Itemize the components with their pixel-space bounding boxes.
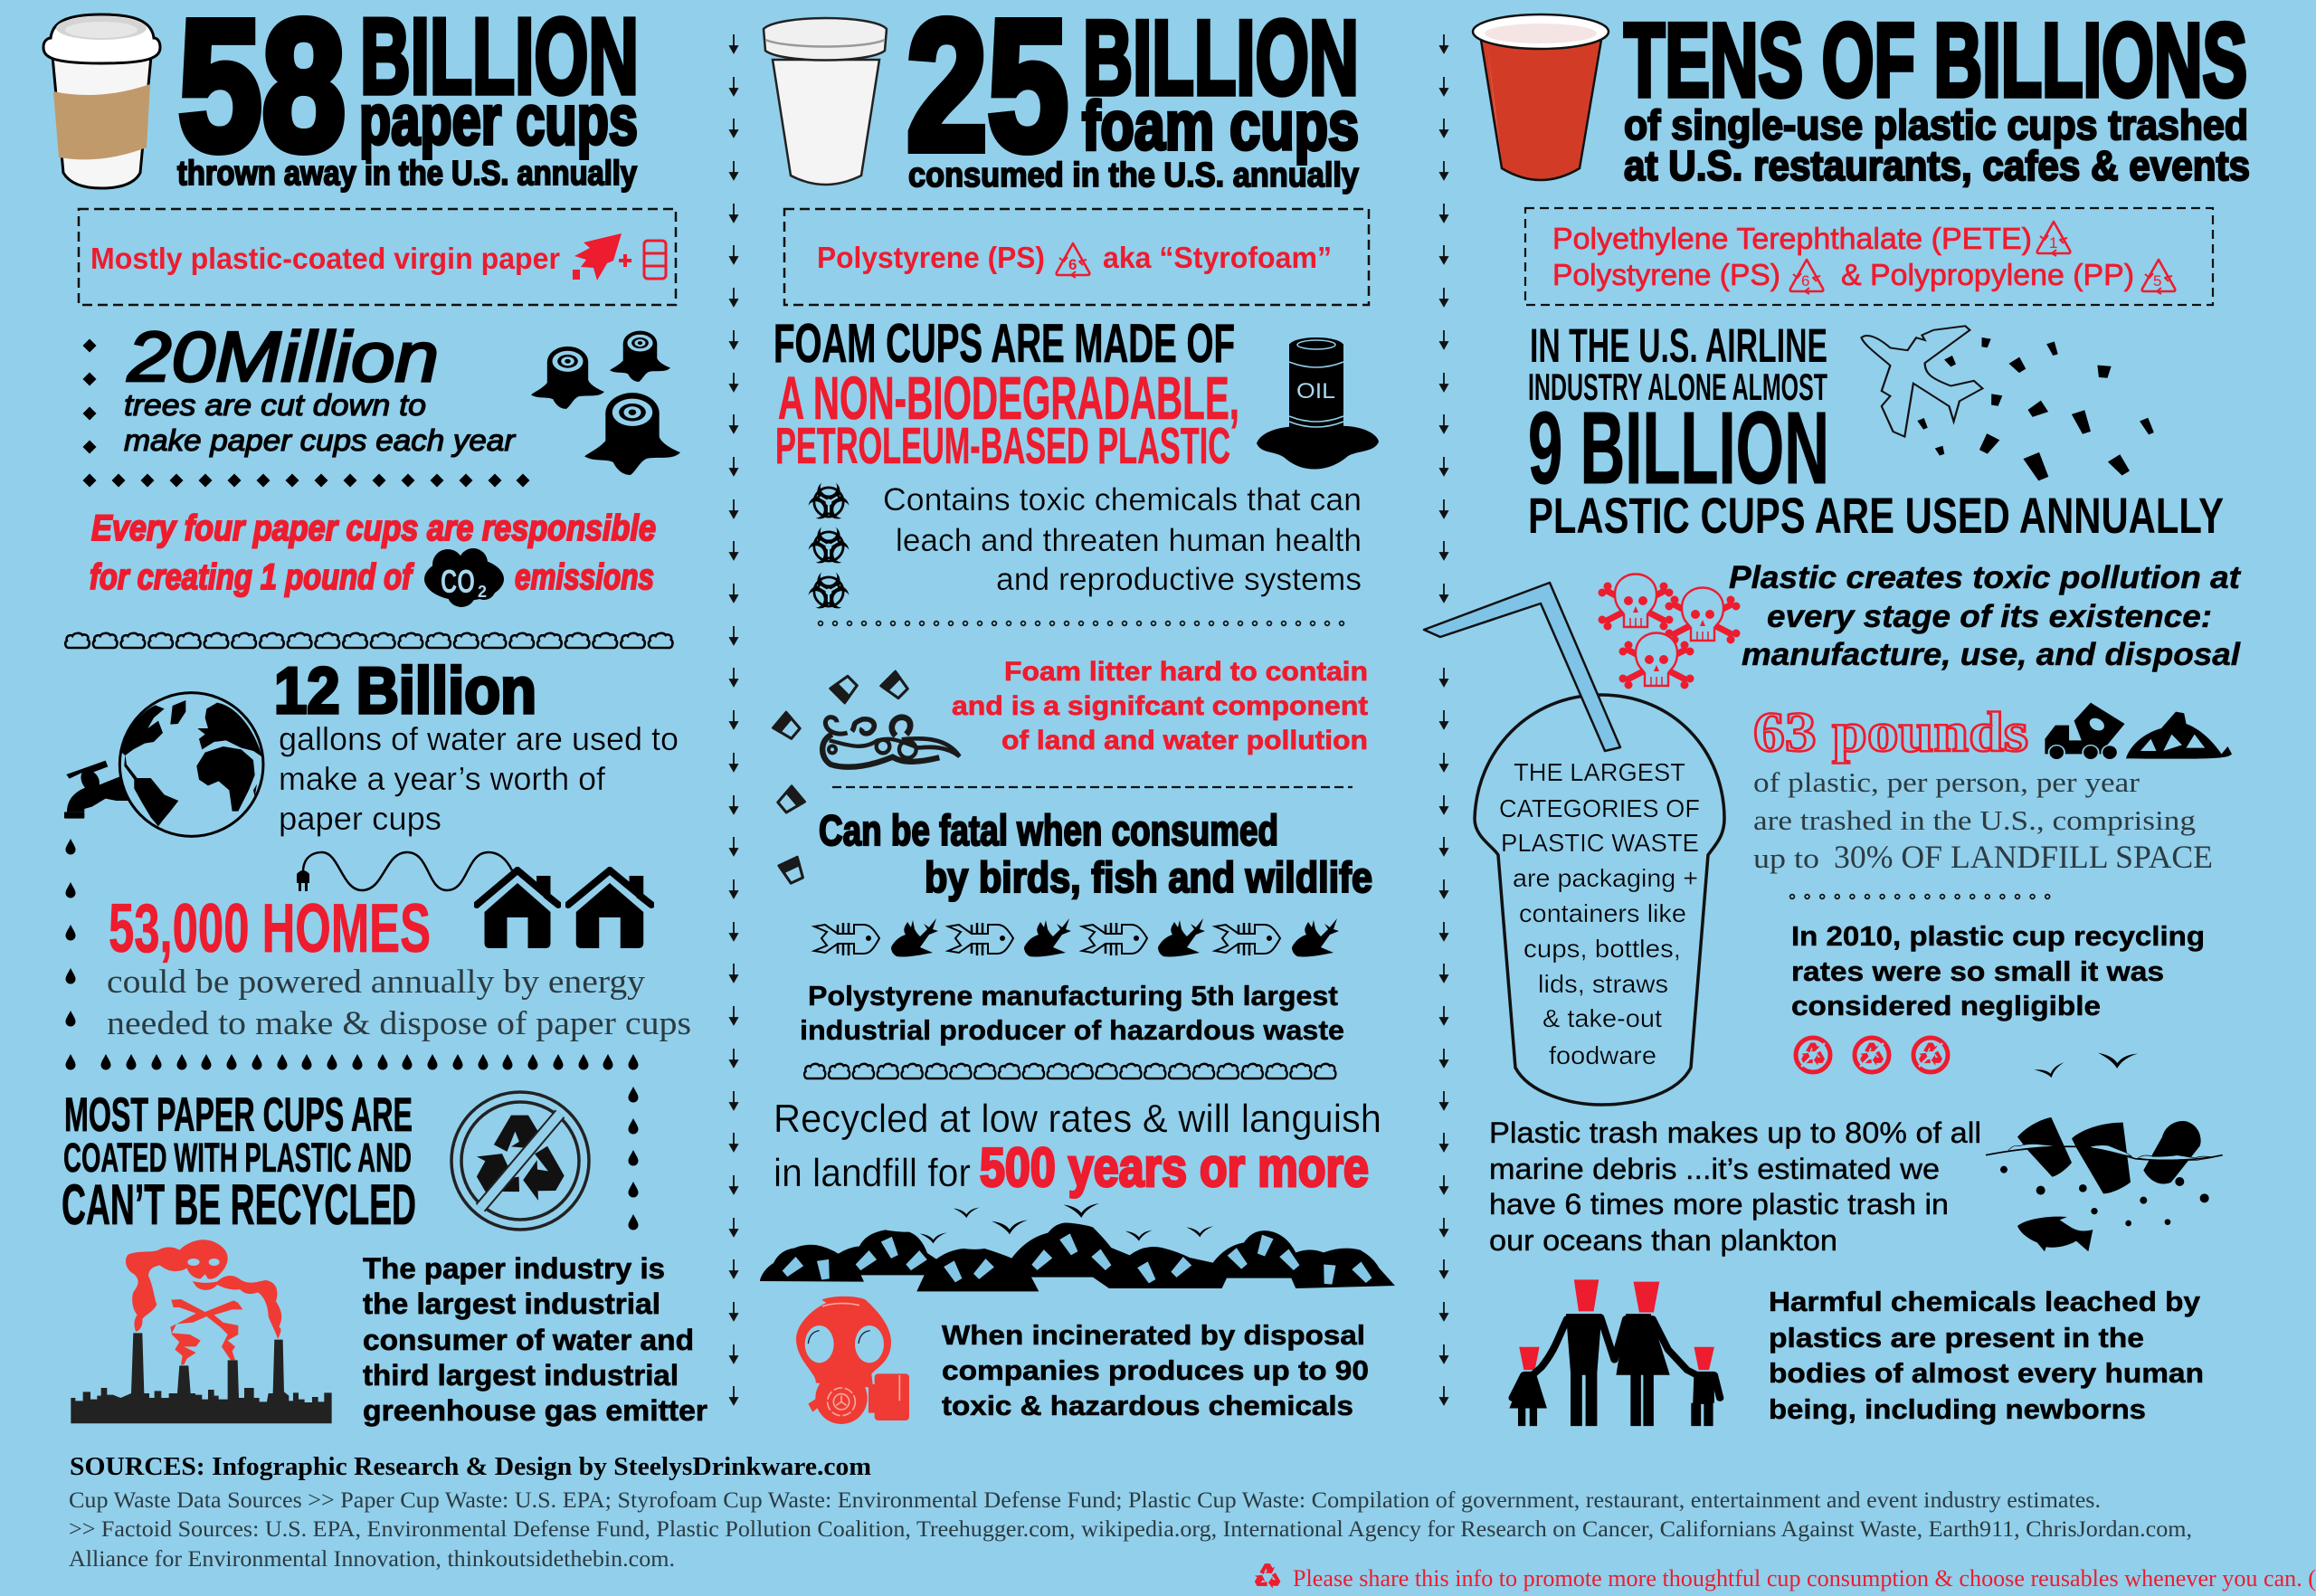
material box: Polystyrene (PS)	[817, 241, 1045, 274]
icon: biohazard symbols	[802, 479, 855, 613]
material box	[79, 209, 676, 305]
water drop border	[65, 839, 639, 1230]
title: tens of billions: of single-use plastic cups trashed	[1624, 101, 2248, 148]
text: inside cup	[1499, 758, 1700, 1069]
sources footer: SOURCES: Infographic Research & Design by SteelysDrinkware.com	[70, 1452, 871, 1481]
icon: CO2 cloud	[424, 548, 504, 607]
stat: 12 billion gallons: gallons of water are used to	[279, 720, 679, 757]
heading: airline industry	[1528, 319, 2224, 544]
title: 58 billion paper cups: thrown away in the U.S. annually	[177, 155, 637, 193]
stat: 63 pounds: up to	[1753, 842, 1819, 874]
sources footer: Alliance for Environmental Innovation, thinkoutsidethebin.com.	[69, 1547, 675, 1572]
icon: CO2 cloud: CO	[441, 563, 475, 600]
stat: 63 pounds	[1753, 702, 2213, 875]
material box	[784, 209, 1369, 305]
material box: 6	[1068, 256, 1077, 273]
heading: cannot be recycled	[62, 1088, 416, 1237]
text: toxic pollution: Plastic creates toxic pollution at	[1729, 560, 2241, 595]
dotted divider	[1792, 894, 2055, 899]
text: inside cup: CATEGORIES OF	[1499, 794, 1700, 822]
heading: foam cups are made of: PETROLEUM-BASED PLASTIC	[775, 417, 1230, 475]
text: 500 years: Recycled at low rates & will languish	[774, 1097, 1381, 1141]
text: foam litter: and is a signifcant component	[952, 691, 1368, 721]
text: inside cup: THE LARGEST	[1514, 758, 1685, 786]
icon: landfill with birds	[760, 1203, 1395, 1291]
callout: CO2 emissions: for creating 1 pound of	[90, 557, 414, 597]
dashed divider	[832, 786, 1353, 788]
heading: airline industry: IN THE U.S. AIRLINE	[1530, 319, 1827, 373]
icon: gas mask	[796, 1297, 909, 1424]
text: harmful chemicals: plastics are present in the	[1769, 1322, 2144, 1354]
title: 58 billion paper cups: paper cups	[359, 80, 638, 159]
icon: red barrel	[644, 241, 666, 279]
text: marine debris: Plastic trash makes up to 80% of all	[1489, 1116, 1981, 1149]
stat: 20 million trees: make paper cups each year	[124, 423, 517, 457]
text: foam litter: of land and water pollution	[1001, 726, 1368, 755]
text: incineration: toxic & hazardous chemicals	[942, 1390, 1353, 1421]
stat: 63 pounds: 30% OF LANDFILL SPACE	[1834, 839, 2213, 875]
stat: 12 billion gallons: paper cups	[279, 800, 441, 837]
text: inside cup: cups, bottles,	[1523, 935, 1681, 963]
icon: globe with faucet	[64, 693, 263, 836]
heading: foam cups are made of: FOAM CUPS ARE MADE OF	[774, 313, 1235, 374]
stat: 20 million trees: 20Million	[127, 317, 439, 396]
text: marine debris: marine debris ...it’s estimated we	[1489, 1153, 1940, 1185]
text: hazardous waste: industrial producer of hazardous waste	[800, 1014, 1344, 1046]
icon: oil barrel	[1257, 337, 1379, 470]
stat: 53,000 homes: needed to make & dispose of paper cups	[107, 1005, 691, 1042]
text: harmful chemicals	[1769, 1286, 2204, 1425]
icon: no recycling	[451, 1092, 589, 1230]
text: inside cup: PLASTIC WASTE	[1501, 829, 1699, 857]
stat: 63 pounds: 63 pounds	[1753, 702, 2028, 764]
heading: foam cups are made of: A NON-BIODEGRADABLE,	[778, 365, 1239, 432]
column divider arrows: right	[1440, 34, 1448, 1404]
text: paper industry: the largest industrial	[363, 1287, 660, 1320]
text: paper industry: The paper industry is	[363, 1252, 665, 1285]
title: 25 billion foam cups	[906, 0, 1359, 195]
text: toxic chemicals: and reproductive systems	[996, 562, 1362, 597]
heading: cannot be recycled: MOST PAPER CUPS ARE	[64, 1088, 413, 1142]
heading: cannot be recycled: CAN’T BE RECYCLED	[62, 1173, 416, 1237]
material box: Mostly plastic-coated virgin paper	[90, 242, 560, 275]
icon: garbage truck and heap	[2045, 703, 2232, 760]
stat: 53,000 homes: could be powered annually by energy	[107, 964, 646, 1001]
sources footer	[69, 1452, 2192, 1572]
material box: 6	[1801, 272, 1809, 290]
material box: Polystyrene (PS)	[1552, 258, 1780, 291]
icon: family with cup heads	[1509, 1279, 1720, 1426]
title: tens of billions	[1624, 3, 2250, 189]
text: inside cup: are packaging +	[1513, 864, 1698, 892]
text: fatal to wildlife: Can be fatal when consumed	[819, 806, 1278, 854]
text: toxic chemicals: leach and threaten human health	[896, 523, 1362, 558]
text: marine debris	[1489, 1116, 1981, 1257]
text: inside cup: containers like	[1519, 899, 1686, 927]
stat: 53,000 homes	[107, 890, 691, 1042]
material box: 5	[2153, 272, 2161, 290]
icon: factory with toxic smoke	[71, 1240, 332, 1423]
text: incineration: When incinerated by disposal	[942, 1319, 1365, 1351]
text: 500 years: 500 years or more	[980, 1137, 1369, 1198]
text: incineration: companies produces up to 90	[942, 1354, 1369, 1386]
title: 25 billion foam cups: consumed in the U.S. annually	[908, 157, 1359, 195]
stat: 12 billion gallons: make a year’s worth of	[279, 760, 606, 797]
text: marine debris: have 6 times more plastic trash in	[1489, 1188, 1949, 1221]
heading: airline industry: INDUSTRY ALONE ALMOST	[1528, 366, 1827, 408]
callout: CO2 emissions	[90, 508, 656, 607]
panel: plastic cups	[1424, 3, 2250, 1426]
icon: plug and wire	[297, 852, 512, 891]
text: harmful chemicals: bodies of almost every human	[1769, 1357, 2204, 1389]
heading: cannot be recycled: COATED WITH PLASTIC AND	[63, 1135, 412, 1181]
text: toxic pollution: every stage of its existence:	[1767, 599, 2212, 634]
callout: CO2 emissions: emissions	[515, 557, 654, 597]
text: fatal to wildlife	[819, 806, 1372, 901]
text: harmful chemicals: being, including newborns	[1769, 1393, 2146, 1425]
material box: aka “Styrofoam”	[1103, 241, 1332, 274]
icon: foam litter with wave	[773, 670, 960, 885]
material box: Polyethylene Terephthalate (PETE)	[1552, 222, 2032, 255]
stat: 63 pounds: of plastic, per person, per year	[1753, 766, 2140, 798]
stat: 20 million trees: trees are cut down to	[124, 388, 426, 422]
text: 2010 recycling: In 2010, plastic cup recycling	[1791, 920, 2205, 952]
icons: fish skeletons and dead birds	[814, 918, 1339, 957]
title: 58 billion paper cups	[177, 0, 639, 193]
material box	[1525, 208, 2213, 305]
icon: cup with straw	[1424, 583, 1724, 1105]
icon: oil barrel: OIL	[1296, 379, 1335, 404]
text: toxic pollution: manufacture, use, and disposal	[1742, 637, 2241, 672]
panel: paper cups	[43, 0, 707, 1427]
stat: 20 million trees	[124, 317, 517, 457]
heading: foam cups are made of	[774, 313, 1239, 475]
cloud divider	[65, 633, 672, 648]
stat: 12 billion gallons	[274, 655, 679, 837]
text: paper industry: greenhouse gas emitter	[363, 1394, 707, 1427]
icon: CO2 cloud: 2	[478, 583, 487, 601]
text: fatal to wildlife: by birds, fish and wildlife	[925, 853, 1372, 901]
text: hazardous waste: Polystyrene manufacturing 5th largest	[808, 980, 1338, 1012]
text: 500 years: in landfill for	[774, 1151, 971, 1195]
icon: houses	[477, 870, 651, 948]
title: 25 billion foam cups: foam cups	[1082, 88, 1359, 165]
dotted divider	[821, 621, 1356, 626]
title: tens of billions: at U.S. restaurants, cafes & events	[1624, 142, 2250, 189]
text: marine debris: our oceans than plankton	[1489, 1224, 1837, 1257]
text: paper industry	[363, 1252, 707, 1427]
icon: skulls	[1598, 574, 1741, 689]
text: toxic chemicals: Contains toxic chemicals that can	[883, 482, 1362, 518]
icon: tree stumps	[531, 331, 680, 475]
text: hazardous waste	[800, 980, 1344, 1046]
text: foam litter: Foam litter hard to contain	[1004, 657, 1368, 687]
icon: cups in ocean with birds and fish	[1986, 1051, 2223, 1251]
icon: foam cup	[764, 18, 887, 185]
text: toxic chemicals	[883, 482, 1362, 597]
stat: 12 billion gallons: 12 Billion	[274, 655, 536, 727]
callout: CO2 emissions: Every four paper cups are responsible	[91, 508, 656, 548]
text: inside cup: foodware	[1549, 1041, 1656, 1069]
stat: 53,000 homes: 53,000 HOMES	[109, 890, 431, 967]
cloud divider	[804, 1064, 1335, 1078]
text: inside cup: lids, straws	[1538, 970, 1668, 998]
text: 2010 recycling	[1791, 920, 2205, 1021]
icons: no recycling red	[1796, 1038, 1948, 1072]
icon: coffee cup	[43, 14, 160, 188]
heading: airline industry: 9 BILLION	[1528, 391, 1829, 505]
text: paper industry: third largest industrial	[363, 1359, 679, 1392]
icon: airplane with falling cups	[1861, 326, 2156, 482]
panel: foam cups	[760, 0, 1395, 1424]
title: 25 billion foam cups: BILLION	[1083, 0, 1359, 117]
icon: red tree	[574, 233, 622, 280]
sources footer: Cup Waste Data Sources >> Paper Cup Waste: U.S. EPA; Styrofoam Cup Waste: Environmental Defense Fund; Plastic Cup Waste: Compilation of government, restaurant, entertainment and event industry estimates.	[69, 1488, 2101, 1513]
text: 2010 recycling: rates were so small it was	[1791, 955, 2164, 987]
text: toxic pollution	[1729, 560, 2241, 672]
text: harmful chemicals: Harmful chemicals leached by	[1769, 1286, 2201, 1317]
text: paper industry: consumer of water and	[363, 1324, 694, 1356]
material box: 1	[2049, 234, 2057, 252]
text: foam litter	[952, 657, 1368, 755]
sources footer: >> Factoid Sources: U.S. EPA, Environmental Defense Fund, Plastic Pollution Coalition, Treehugger.com, wikipedia.org, International Agency for Research on Cancer, Californians Against Waste, Earth911, ChrisJordan.com,	[69, 1517, 2192, 1542]
diamond border	[83, 338, 530, 487]
text: incineration	[942, 1319, 1369, 1421]
text: 2010 recycling: considered negligible	[1791, 990, 2101, 1021]
text: 500 years	[774, 1097, 1381, 1198]
share note with recycle icon: Please share this info to promote more thoughtful cup consumption & choose reusables whenever you can. (	[1293, 1565, 2316, 1591]
material box: & Polypropylene (PP)	[1841, 258, 2134, 291]
icon: red plastic cup	[1473, 14, 1609, 180]
column divider arrows: left	[730, 34, 737, 1404]
text: inside cup: & take-out	[1542, 1004, 1662, 1032]
stat: 63 pounds: are trashed in the U.S., comprising	[1753, 804, 2196, 836]
